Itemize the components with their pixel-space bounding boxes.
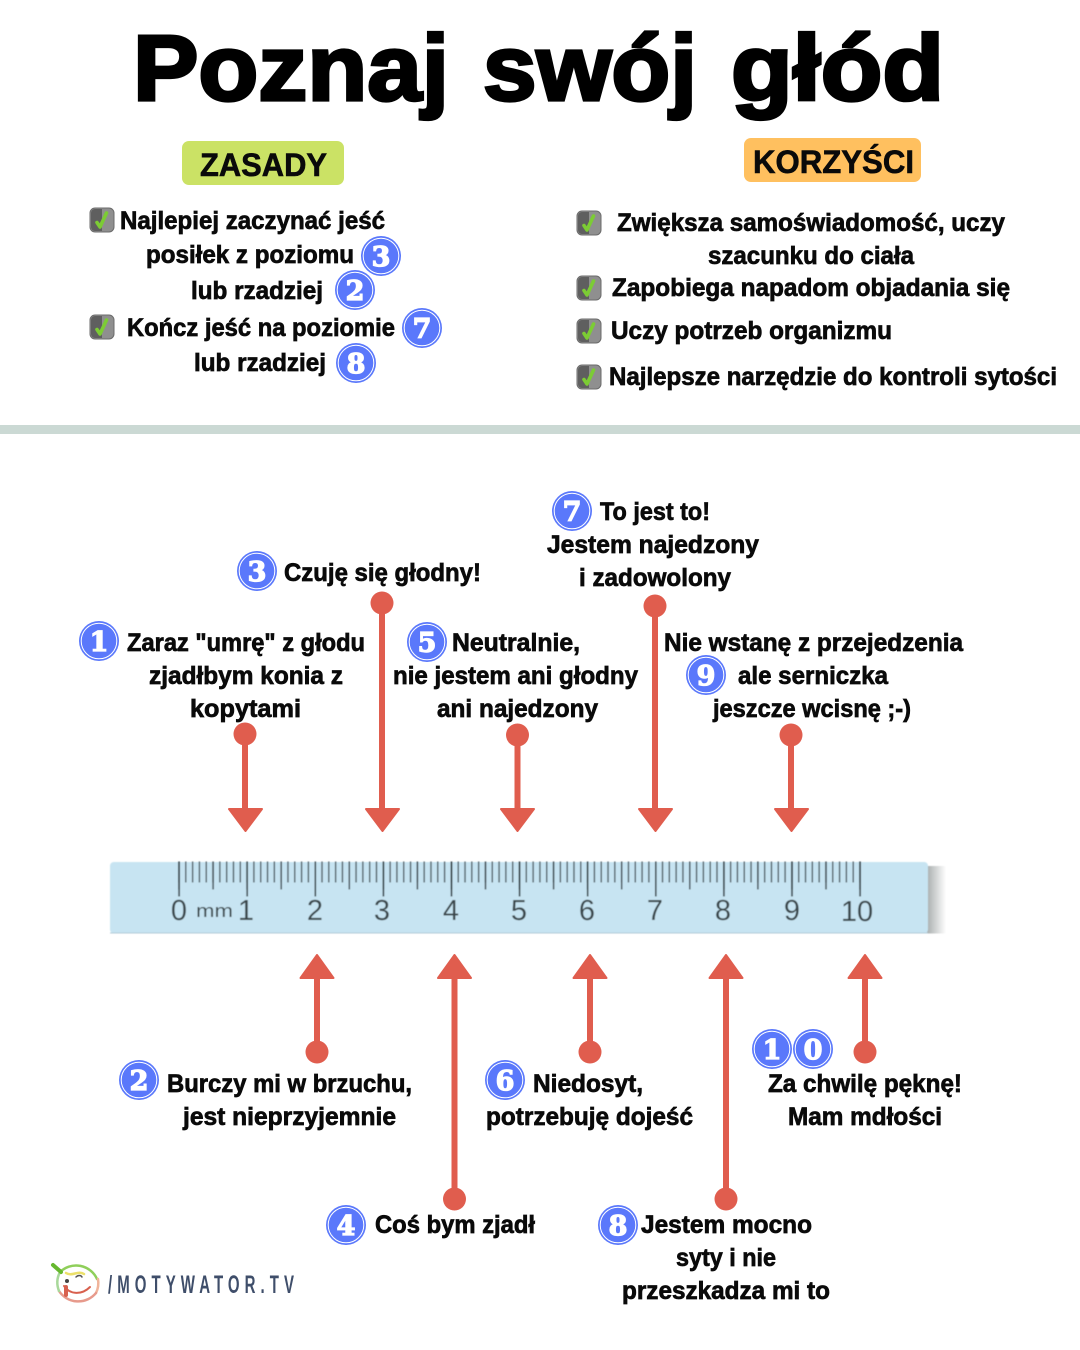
level 10 label [752,1029,962,1131]
arrow: level 4 [438,955,471,1210]
ruler: 0 [171,895,187,927]
ruler: mm [196,901,233,921]
arrow: level 9 [775,724,808,831]
level 6 label [485,1060,693,1131]
level 2 label [119,1060,412,1131]
level 3 label: Czuję się głodny! [284,559,481,587]
rule: start eating: Najlepiej zaczynać jeść [120,207,385,235]
rule: stop eating: lub rzadziej [194,349,326,377]
ruler: 1 [238,895,254,927]
level 5 label: nie jestem ani głodny [393,662,638,690]
level 1 label: Zaraz "umrę" z głodu [127,629,365,657]
level 7 label: i zadowolony [579,564,731,592]
benefit: self-awareness: szacunku do ciała [708,242,915,270]
rule: stop eating: 7 [413,314,431,345]
level 8 label: Jestem mocno [641,1211,812,1239]
ruler: 9 [784,895,800,927]
level 7 label [547,491,759,592]
level 2 label: Burczy mi w brzuchu, [167,1070,412,1098]
arrow: level 8 [710,955,742,1210]
level 9 label: ale serniczka [738,662,889,690]
ruler: 10 [841,896,873,928]
arrow: level 3 [366,592,399,831]
ruler: 3 [374,895,390,927]
level 4 label: Coś bym zjadł [375,1211,535,1239]
level 8 label: przeszkadza mi to [622,1277,830,1305]
arrow: level 2 [300,955,334,1064]
title [133,16,944,120]
level 8 label: 8 [609,1211,627,1242]
level 9 label: 9 [697,661,715,692]
benefit: self-awareness: Zwiększa samoświadomość, uczy [617,209,1005,237]
level 1 label [79,621,365,723]
level 3 label [237,551,481,591]
rule: stop eating: Kończ jeść na poziomie [127,314,395,342]
rule: stop eating [90,308,442,383]
rule: start eating: lub rzadziej [191,277,323,305]
level 5 label [393,622,638,723]
level 2 label: 2 [130,1066,148,1097]
level 2 label: jest nieprzyjemnie [182,1103,396,1131]
level 7 label: Jestem najedzony [547,531,759,559]
benefit: prevents overeating: Zapobiega napadom objadania się [612,274,1010,302]
level 6 label: 6 [496,1066,514,1097]
level 7 label: 7 [563,497,581,528]
logo [53,1265,294,1301]
ruler: 5 [511,895,527,927]
level 1 label: zjadłbym konia z [149,662,343,690]
level 8 label: syty i nie [676,1244,776,1272]
level 1 label: kopytami [190,695,301,723]
rule: start eating: 2 [346,276,364,307]
ruler: 7 [647,895,663,927]
arrow: level 10 [848,955,882,1064]
ruler [110,862,946,934]
heading: zasady [182,141,344,185]
title: Poznaj [133,16,449,120]
level 8 label [598,1205,830,1305]
level 6 label: Niedosyt, [533,1070,643,1098]
level 6 label: potrzebuję dojeść [486,1103,693,1131]
benefit: satiety control: Najlepsze narzędzie do kontroli sytości [609,363,1057,391]
rule: start eating [90,207,401,310]
arrow: level 1 [229,722,262,831]
title: swój [483,16,697,120]
ruler: 8 [715,895,731,927]
level 4 label [326,1205,535,1245]
arrow: level 5 [501,724,534,831]
level 5 label: Neutralnie, [452,629,580,657]
level 10 label: 1 [763,1035,781,1066]
level 9 label: jeszcze wcisnę ;-) [712,695,911,723]
rule: start eating: 3 [372,242,390,273]
arrow: level 6 [574,955,606,1064]
icon: smiling face [53,1265,98,1301]
ruler: 4 [443,895,459,927]
level 9 label [664,629,964,723]
benefit: teaches needs: Uczy potrzeb organizmu [611,317,892,345]
level 10 label: 0 [804,1035,822,1066]
level 5 label: 5 [418,628,436,659]
heading: zasady: ZASADY [200,147,327,183]
rule: stop eating: 8 [347,349,365,380]
level 1 label: 1 [90,627,108,658]
ruler: 2 [307,895,323,927]
level 7 label: To jest to! [600,498,710,526]
heading: korzyści: KORZYŚCI [753,144,914,180]
rule: start eating: posiłek z poziomu [146,241,354,269]
level 10 label: Za chwilę pęknę! [768,1070,962,1098]
level 4 label: 4 [337,1211,355,1242]
level 3 label: 3 [248,557,266,588]
logo: /MOTYWATOR.TV [108,1271,294,1299]
level 9 label: Nie wstanę z przejedzenia [664,629,964,657]
panel: zasady [90,141,442,383]
level 10 label: Mam mdłości [788,1103,942,1131]
title: głód [731,16,944,120]
panel: korzyści [577,138,1057,391]
benefit: self-awareness [577,209,1005,270]
level 5 label: ani najedzony [437,695,598,723]
arrow: level 7 [639,594,672,831]
ruler: 6 [579,895,595,927]
